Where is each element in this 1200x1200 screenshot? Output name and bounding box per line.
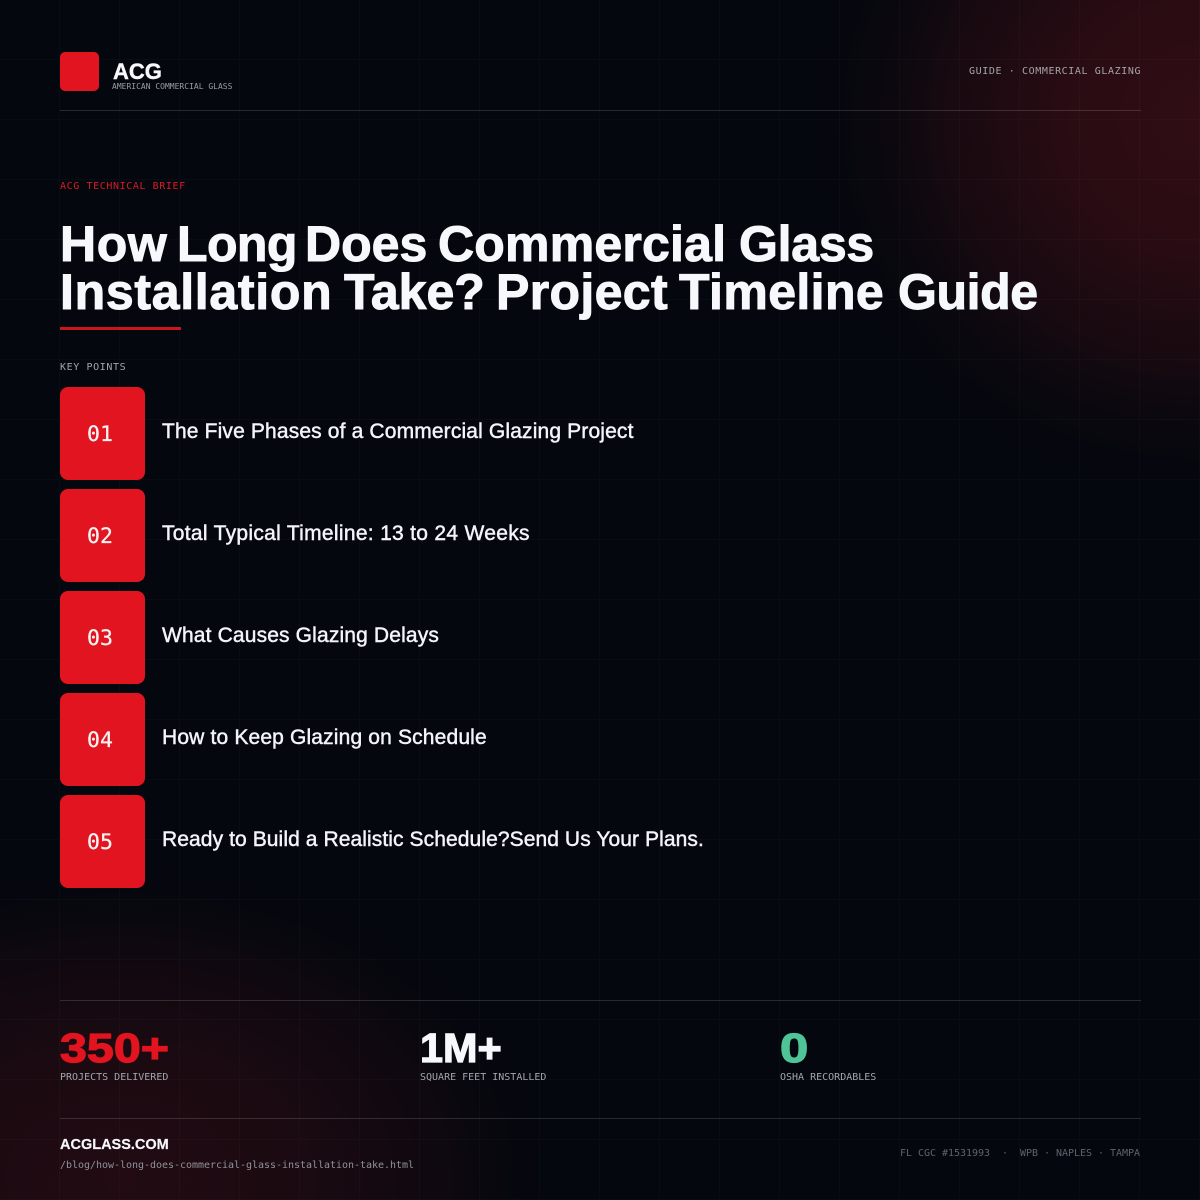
point text 3: What Causes Glazing Delays (162, 624, 439, 647)
stat label: OSHA RECORDABLES (780, 1072, 876, 1083)
title underline (60, 327, 181, 330)
key point 5 (60, 795, 704, 888)
point text 5: Ready to Build a Realistic Schedule?Send Us Your Plans. (162, 828, 704, 851)
number tile 03: 03 (87, 626, 113, 651)
number tile 05 (60, 795, 145, 888)
key point 1 (60, 387, 634, 480)
title: Installation (60, 264, 332, 320)
eyebrow: ACG TECHNICAL BRIEF (60, 181, 186, 192)
header logo lockup (60, 52, 232, 91)
footer site name: ACGLASS.COM (60, 1137, 169, 1153)
stat label: PROJECTS DELIVERED (60, 1072, 168, 1083)
number tile 02 (60, 489, 145, 582)
key point 3 (60, 591, 439, 684)
point text 2: Total Typical Timeline: 13 to 24 Weeks (162, 522, 530, 545)
number tile 01 (60, 387, 145, 480)
title: Commercial (438, 216, 726, 272)
key point 2 (60, 489, 530, 582)
number tile 01: 01 (87, 422, 113, 447)
stat value 0: 0 (780, 1025, 808, 1071)
number tile 03 (60, 591, 145, 684)
key point 4 (60, 693, 487, 786)
title: Take? (344, 264, 485, 320)
title: Guide (898, 264, 1038, 320)
title (60, 216, 1038, 320)
point text 1: The Five Phases of a Commercial Glazing Project (162, 420, 634, 443)
title: Project (496, 264, 668, 320)
number tile 02: 02 (87, 524, 113, 549)
footer URL: /blog/how-long-does-commercial-glass-installation-take.html (60, 1160, 414, 1171)
title: How (60, 216, 167, 272)
icon: red logo square (60, 52, 99, 91)
title: Timeline (679, 264, 884, 320)
number tile 05: 05 (87, 830, 113, 855)
stat value 1M+: 1M+ (420, 1025, 502, 1071)
stat: projects delivered (60, 1025, 169, 1083)
number tile 04: 04 (87, 728, 113, 753)
number tile 04 (60, 693, 145, 786)
brand subtitle: AMERICAN COMMERCIAL GLASS (112, 82, 232, 91)
stat: square feet installed (420, 1025, 546, 1083)
header tag: GUIDE · COMMERCIAL GLAZING (969, 66, 1141, 77)
point text 4: How to Keep Glazing on Schedule (162, 726, 487, 749)
brand name: ACG (113, 59, 162, 84)
stat label: SQUARE FEET INSTALLED (420, 1072, 546, 1083)
stat value 350+: 350+ (60, 1025, 169, 1071)
title: Glass (739, 216, 874, 272)
title: Long (177, 216, 297, 272)
stat: OSHA recordables (780, 1025, 876, 1083)
title: Does (305, 216, 427, 272)
footer credentials: FL CGC #1531993 · WPB · NAPLES · TAMPA (900, 1148, 1140, 1159)
key points label: KEY POINTS (60, 362, 126, 373)
